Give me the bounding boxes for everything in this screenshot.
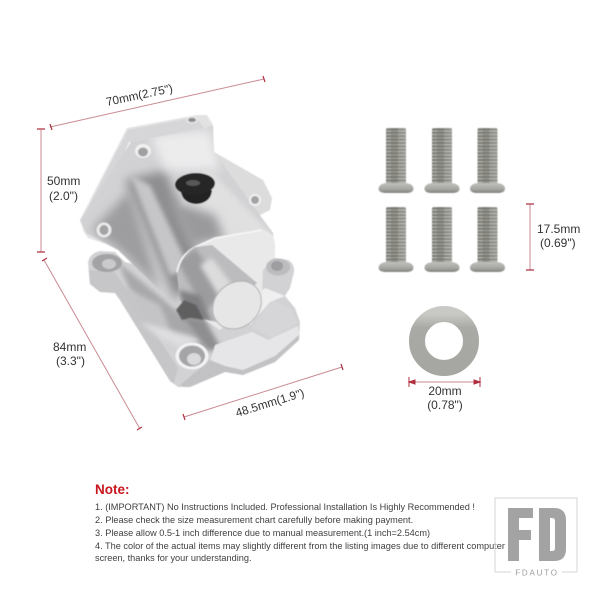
- FD watermark logo: FDAUTO: [515, 568, 559, 578]
- note text: screen, thanks for your understanding.: [95, 553, 252, 563]
- cylinder body: [80, 126, 274, 302]
- piston shaft: [176, 244, 257, 322]
- dimension: width 70mm: [50, 76, 265, 130]
- piston end cap: [203, 271, 271, 339]
- dimension: length 84mm: [42, 258, 142, 430]
- washer: [417, 314, 471, 368]
- right rear flange: [214, 152, 272, 216]
- dimension: washer 20mm: [409, 377, 480, 412]
- note heading: Note:: [95, 482, 130, 497]
- top flange plate: [80, 115, 214, 255]
- dimension: length 84mm: (3.3"): [56, 354, 85, 368]
- note text: 4. The color of the actual items may slightly different from the listing images due to different computer: [95, 541, 505, 551]
- dimension: washer 20mm: (0.78"): [427, 398, 463, 412]
- dimension: bolt length 17.5mm: [526, 204, 580, 270]
- dimension: width 48.5mm: [183, 364, 343, 420]
- dimension: height 50mm: 50mm: [47, 174, 80, 188]
- note text: 2. Please check the size measurement chart carefully before making payment.: [95, 515, 413, 525]
- dimension: bolt length 17.5mm: 17.5mm: [537, 222, 580, 236]
- note text: 1. (IMPORTANT) No Instructions Included. Professional Installation Is Highly Recommended !: [95, 502, 475, 512]
- dimension: length 84mm: 84mm: [53, 340, 86, 354]
- front boss: [177, 230, 275, 330]
- dimension: width 70mm: 70mm(2.75"): [105, 81, 174, 109]
- dimension: washer 20mm: 20mm: [428, 384, 462, 398]
- product: silver aluminium housing: [78, 115, 300, 390]
- dimension: bolt length 17.5mm: (0.69"): [540, 236, 576, 250]
- FD watermark logo: [495, 498, 577, 578]
- dimension: height 50mm: (2.0"): [49, 189, 78, 203]
- black hex plug: [174, 172, 216, 204]
- base plate: [88, 251, 300, 390]
- note text: [95, 502, 505, 563]
- mounting holes: [92, 116, 290, 370]
- dimension: height 50mm: [37, 129, 80, 252]
- six bolts: [378, 128, 505, 272]
- shadow at piston root: [176, 300, 204, 320]
- note text: 3. Please allow 0.5-1 inch difference due to manual measurement.(1 inch=2.54cm): [95, 528, 430, 538]
- dimension: width 48.5mm: 48.5mm(1.9"): [234, 386, 306, 420]
